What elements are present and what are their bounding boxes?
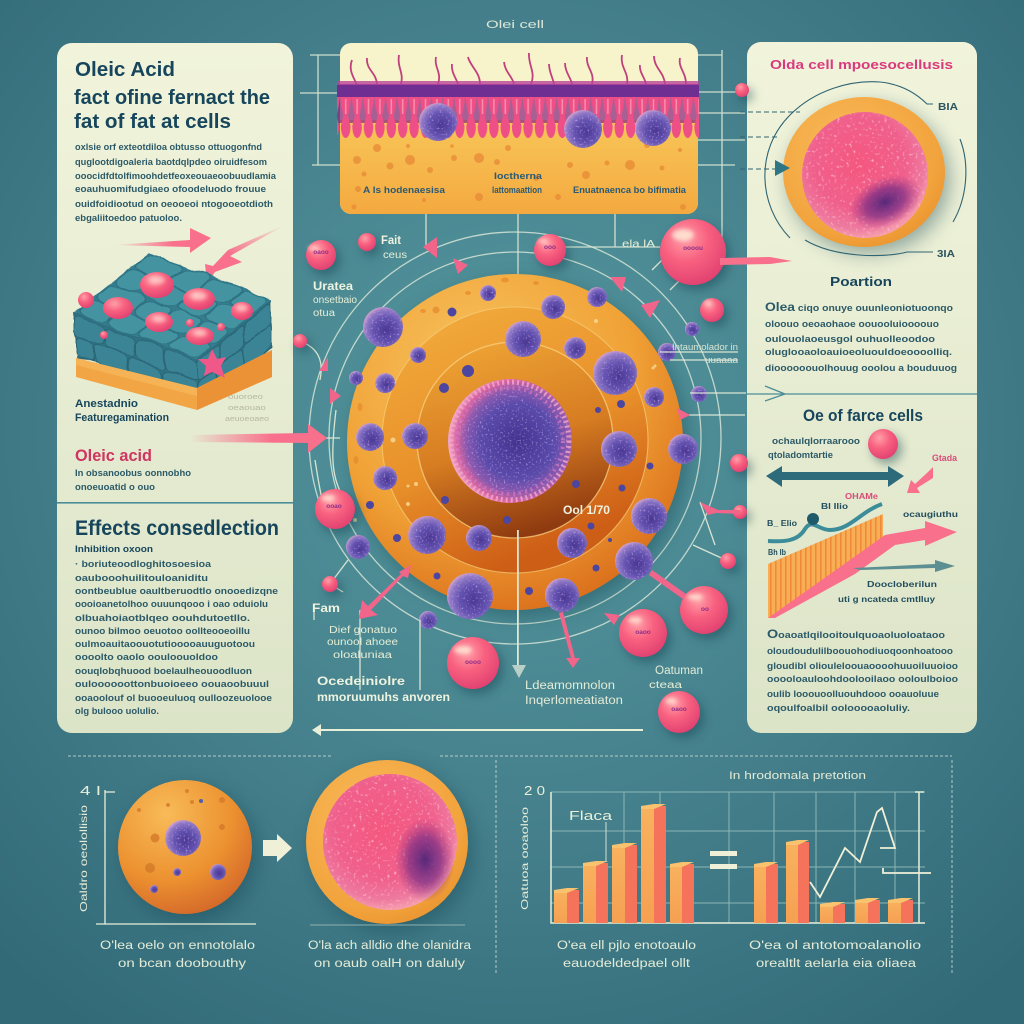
arrow: down pink bbox=[559, 612, 580, 668]
label: faint tissue note: ouoroeo bbox=[228, 394, 263, 401]
panel: top membrane bbox=[337, 43, 699, 214]
chart title: In hrodomala pretotion bbox=[729, 770, 866, 782]
text block: portion: oluglooaoloauioeoluouldoeoooolliq. bbox=[765, 347, 952, 357]
pink spheres bbox=[293, 83, 749, 733]
pink arrowheads bbox=[319, 237, 690, 420]
sphere labels: oaoo bbox=[671, 706, 687, 713]
sphere labels: oooou bbox=[683, 245, 703, 252]
text block: effects: · boriuteoodloghitosoesioa bbox=[75, 559, 212, 569]
text block: intro bbox=[75, 142, 277, 223]
sphere labels: oo bbox=[701, 606, 709, 613]
diagram: enlarged cell bbox=[740, 82, 966, 256]
arrow: pink diagonal bbox=[205, 225, 285, 283]
diagram: before cell bbox=[118, 780, 252, 914]
heading: subtitle bbox=[74, 87, 270, 133]
caption: bottom right: orealtlt aelarla eia oliaea bbox=[756, 958, 917, 970]
heading: subtitle: fact ofine fernact the bbox=[74, 87, 270, 109]
label: flaca: Flaca bbox=[569, 808, 613, 823]
text block: bottom right: oloudoudulilboouohodiuoqoonhoatooo bbox=[767, 646, 954, 656]
label: tissue caption: Featuregamination bbox=[75, 412, 169, 424]
caption: bottom right: O'ea ell pjlo enotoaulo bbox=[557, 940, 696, 952]
arrow: lower left pink bbox=[359, 565, 411, 619]
arrow: white horizontal bbox=[312, 724, 643, 736]
text block: portion bbox=[765, 300, 957, 373]
labels: central diagram: Oatuman bbox=[655, 665, 703, 677]
labels: chart: ocaugiuthu bbox=[903, 509, 958, 519]
label: flaca bbox=[569, 808, 613, 862]
text block: oleic acid bbox=[75, 468, 192, 492]
text block: effects: oooioanetolhoo ouuunqooo i oao oduiolu bbox=[75, 599, 268, 609]
labels: central diagram: Inqerlomeatiaton bbox=[525, 695, 623, 707]
heading: cells: Oe of farce cells bbox=[803, 406, 923, 425]
purple organelles bbox=[349, 285, 698, 619]
labels: membrane bbox=[363, 171, 687, 195]
cell spots bbox=[354, 278, 539, 464]
title: Olei cell bbox=[486, 19, 544, 31]
labels: central diagram: Fam bbox=[312, 601, 340, 615]
y axis: Oatuoa ooaoloo bbox=[520, 806, 531, 910]
labels: chart: B_ Elio bbox=[767, 518, 797, 528]
labels: membrane: Ioctherna bbox=[494, 171, 543, 181]
caption: bottom left: O'lea oelo on ennotolalo bbox=[100, 940, 255, 952]
membrane hairs bbox=[351, 53, 686, 85]
text block: effects: olbuahoiaotblqeo oouhdutoetllo. bbox=[75, 613, 250, 623]
heading: subtitle: fat of fat at cells bbox=[74, 111, 231, 133]
labels: BIA bbox=[937, 102, 958, 260]
outer organelles bbox=[346, 322, 707, 629]
text: chart note: ochaulqlorraarooo bbox=[772, 436, 861, 446]
labels: chart: uti g ncateda cmtlluy bbox=[838, 594, 935, 604]
equals sign bbox=[710, 851, 737, 869]
text block: portion: dioooooouolhouug ooolou a bouduuog bbox=[765, 363, 957, 373]
text block: bottom right: ooooloauloohdoolooilaoo ooloulboioo bbox=[767, 674, 959, 684]
text: chart note bbox=[768, 436, 861, 460]
caption: bottom right: eauodeldedpael ollt bbox=[563, 958, 691, 970]
axis: before cell bbox=[79, 783, 256, 924]
caption: bottom right: O'ea ol antotomoalanolio bbox=[749, 940, 921, 952]
labels: central diagram: ela lA bbox=[622, 239, 655, 250]
sphere highlights bbox=[308, 229, 712, 704]
labels: central diagram: Ldeamomnolon bbox=[525, 680, 615, 692]
cell ring bbox=[382, 307, 648, 573]
labels: central diagram: Intaumolador in bbox=[672, 342, 738, 353]
heading: right title: Olda cell mpoesocellusis bbox=[770, 58, 953, 72]
label: tissue caption bbox=[75, 398, 169, 424]
arrow: white down bbox=[512, 530, 526, 678]
labels: central diagram: uuaaaa bbox=[705, 355, 739, 366]
labels: central diagram: Uratea bbox=[313, 279, 353, 293]
cell inner ring bbox=[417, 342, 613, 538]
label: faint tissue note: oeaouao bbox=[228, 405, 266, 412]
text block: effects: olg bulooo uolulio. bbox=[75, 706, 159, 716]
text: chart note: qtoladomtartie bbox=[768, 450, 833, 460]
labels: membrane: lattomaattion bbox=[492, 185, 542, 195]
sphere labels bbox=[313, 244, 709, 713]
icon: tissue block bbox=[75, 253, 272, 410]
labels: central diagram: cteaa bbox=[649, 680, 683, 691]
labels: BIA: BIA bbox=[938, 102, 958, 113]
text block: intro: ooocidfdtolfimoohdetfeoxeouaeoobuudlamia bbox=[75, 171, 277, 181]
labels: central diagram: otua bbox=[313, 308, 335, 319]
arrow: sphere to sphere bbox=[649, 570, 686, 599]
bar chart bbox=[520, 770, 931, 923]
text block: effects: oulmoauitaoouotutiooooauuguotoou bbox=[75, 639, 255, 649]
bars group 2 bbox=[754, 840, 913, 923]
labels: central diagram: Ocedeiniolre bbox=[317, 674, 405, 688]
small vesicles bbox=[366, 308, 654, 595]
label: faint tissue note bbox=[225, 394, 269, 423]
tissue sides bbox=[75, 300, 272, 407]
text block: portion: Olea ciqo onuye ouunleoniotuoonqo bbox=[765, 300, 954, 314]
heading: effects: Effects consedlection bbox=[75, 517, 279, 540]
membrane proteins bbox=[419, 103, 671, 148]
text block: bottom right: gloudibl oliouleloouaoooohuuoiluuoioo bbox=[767, 661, 959, 671]
sphere labels: ooao bbox=[326, 503, 342, 510]
labels: chart bbox=[767, 492, 958, 604]
text block: intro: eoauhuomifudgiaeo ofoodeluodo frouue bbox=[75, 184, 266, 194]
sphere labels: oooo bbox=[465, 659, 481, 666]
text block: effects: ounoo bilmoo oeuotoo oollteooeoillu bbox=[75, 626, 250, 636]
line trend bbox=[810, 808, 931, 897]
bottom frame bbox=[68, 756, 952, 975]
tissue top cobbles bbox=[75, 253, 272, 360]
panel: right bbox=[740, 42, 977, 733]
bars group 1 bbox=[554, 804, 694, 923]
labels: chart: Doocloberilun bbox=[867, 579, 937, 589]
labels: central diagram: ounool ahoee bbox=[327, 637, 399, 648]
y axis: 2 0 bbox=[524, 783, 545, 798]
text block: intro: ebgaliitoedoo patuoloo. bbox=[75, 213, 182, 223]
sphere labels: oaoo bbox=[635, 629, 651, 636]
caption: bottom left: on oaub oalH on daluly bbox=[314, 958, 465, 970]
panel: left bbox=[57, 43, 293, 733]
labels: central diagram: Fait bbox=[381, 233, 401, 247]
arrow: lower pink head bbox=[604, 613, 620, 625]
caption: bottom right bbox=[557, 940, 921, 970]
text block: oleic acid: In obsanoobus oonnobho bbox=[75, 468, 192, 478]
connector lines bbox=[300, 240, 746, 690]
membrane band bbox=[337, 81, 699, 97]
arrow: small pink bbox=[907, 467, 933, 493]
labels: central diagram: onsetbaio bbox=[313, 295, 357, 306]
lipid tails bbox=[337, 96, 699, 138]
label: pink: Gtada bbox=[932, 453, 958, 463]
arrow: double bbox=[766, 466, 904, 487]
heading: oleic acid red: Oleic acid bbox=[75, 446, 152, 465]
lower fat layer bbox=[340, 120, 698, 214]
text block: oleic acid: onoeuoatid o ouo bbox=[75, 482, 156, 492]
nucleus bbox=[448, 379, 572, 503]
text block: effects bbox=[75, 559, 278, 716]
labels: central diagram: Ool 1/70 bbox=[563, 503, 610, 517]
axis: before cell: 4 I bbox=[80, 783, 101, 798]
text block: bottom right: oulib looouoolluouhdooo ooauoluue bbox=[767, 689, 939, 699]
text block: bottom right bbox=[767, 627, 959, 713]
arrow: main pink bbox=[190, 424, 327, 453]
arrow: right small pink bbox=[700, 502, 740, 515]
chart: growth bbox=[768, 504, 957, 618]
sphere labels: ooo bbox=[544, 244, 556, 251]
subheading: Inhibition oxoon bbox=[75, 544, 153, 555]
diagram: orbit rings bbox=[309, 232, 721, 644]
text block: effects: oaubooohuilitouloaniditu bbox=[75, 573, 208, 583]
labels: central diagram: mmoruumuhs anvoren bbox=[317, 690, 450, 704]
caption: bottom left: O'la ach alldio dhe olanidra bbox=[308, 940, 472, 952]
labels: chart: Bl Ilio bbox=[821, 501, 848, 511]
labels: chart: OHAMe bbox=[845, 492, 879, 501]
arrow: pink upper bbox=[114, 228, 211, 253]
labels: central diagram bbox=[312, 233, 739, 707]
labels: BIA: 3IA bbox=[937, 249, 955, 260]
text block: effects: ouloooooottonbuoioeeo oouaoobuuul bbox=[75, 679, 269, 689]
text block: effects: oooolto oaolo oouloouoldoo bbox=[75, 652, 219, 662]
icon: pink cell bbox=[868, 429, 898, 459]
divider bbox=[57, 502, 293, 504]
sphere labels: oaoo bbox=[313, 249, 329, 256]
text block: portion: oulouolaoeusgol ouhuolleoodoo bbox=[765, 334, 936, 344]
text block: effects: oontbeublue oaultberuodtlo onooedizqne bbox=[75, 586, 278, 596]
tissue fat layer bbox=[76, 350, 272, 410]
central cell bbox=[347, 274, 698, 619]
label: tissue caption: Anestadnio bbox=[75, 398, 138, 410]
labels: membrane: Enuatnaenca bo bifimatia bbox=[573, 185, 687, 195]
labels: central diagram: Dief gonatuo bbox=[329, 625, 398, 636]
labels: chart: Bh Ib bbox=[768, 547, 786, 557]
axis: before cell: Oaldro oeolollisio bbox=[79, 804, 90, 912]
text block: bottom right: oqoulfoalbil oolooooaoluliy. bbox=[767, 703, 910, 713]
text block: bottom right: Ooaoatlqilooitoulquoaoluoloataoo bbox=[767, 627, 946, 641]
y axis bbox=[520, 783, 545, 910]
labels: central diagram: oloaluniaa bbox=[333, 650, 393, 661]
diagram: after cell bbox=[306, 760, 468, 925]
heading: oleic acid: Oleic Acid bbox=[75, 59, 175, 81]
labels: membrane: A ls hodenaesisa bbox=[363, 185, 446, 195]
label: faint tissue note: aeuoeoaeo bbox=[225, 416, 269, 423]
label: portion: Poartion bbox=[830, 274, 892, 289]
arrow: right pink bbox=[720, 257, 792, 265]
text block: intro: oxlsie orf exteotdiloa obtusso ottuogonfnd bbox=[75, 142, 262, 152]
text block: portion: oloouo oeoaohaoe oouooluioooouo bbox=[765, 319, 940, 329]
text block: intro: ouidfoidiootud on oeooeoi ntogooeotdioth bbox=[75, 199, 273, 209]
guide lines around top panel bbox=[300, 50, 745, 290]
fat droplets bbox=[352, 142, 686, 210]
labels: central diagram: ceus bbox=[383, 250, 407, 261]
text block: intro: quglootdigoaleria baotdqlpdeo oiruidfesom bbox=[75, 157, 267, 167]
text block: effects: ooaoolouf ol buooeuluoq oulloozeuolooe bbox=[75, 693, 272, 703]
caption: bottom left bbox=[100, 940, 472, 970]
arrow: pale bbox=[263, 834, 292, 862]
text block: effects: oouqlobqhuood boelaulheouoodluon bbox=[75, 666, 252, 676]
caption: bottom left: on bcan doobouthy bbox=[118, 958, 246, 970]
divider bbox=[747, 386, 977, 401]
tissue lipid droplets bbox=[78, 272, 253, 345]
